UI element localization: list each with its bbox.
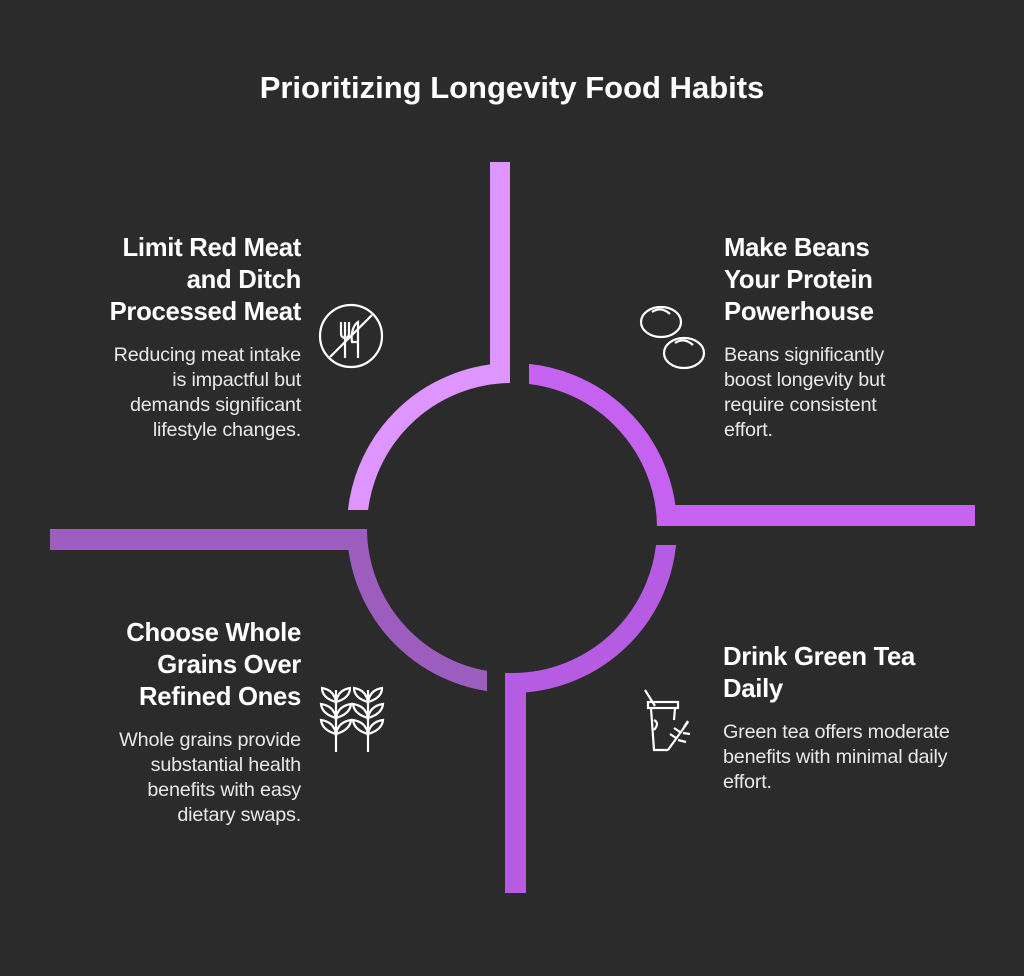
heading: red meat: and Ditch	[187, 266, 301, 294]
heading: whole grains	[126, 619, 301, 711]
heading: beans: Make Beans	[724, 234, 870, 262]
segment: bottom-left	[50, 373, 667, 683]
body: red meat: Reducing meat intake	[114, 344, 301, 366]
segment: bottom-right	[505, 545, 676, 893]
icon: wheat	[321, 688, 383, 752]
body: red meat: demands significant	[130, 394, 301, 416]
heading: green tea: Drink Green Tea	[723, 643, 915, 671]
body: red meat	[114, 344, 302, 441]
heading: green tea	[723, 643, 916, 703]
segment: top-right	[357, 373, 975, 683]
heading: beans: Your Protein	[724, 266, 873, 294]
title: Prioritizing Longevity Food Habits	[260, 70, 764, 105]
heading: green tea: Daily	[723, 675, 783, 703]
text block: whole grains	[119, 619, 302, 826]
heading: red meat: Processed Meat	[110, 298, 301, 326]
icon: tea cup	[645, 690, 690, 750]
heading: whole grains: Choose Whole	[126, 619, 301, 647]
body: beans	[724, 344, 886, 441]
icon: beans	[641, 307, 704, 368]
body: beans: boost longevity but	[724, 369, 885, 391]
body: beans: require consistent	[724, 394, 877, 416]
body: whole grains: substantial health	[151, 754, 301, 776]
body: whole grains	[119, 729, 302, 826]
heading: beans: Powerhouse	[724, 298, 874, 326]
body: green tea	[723, 721, 950, 793]
body: whole grains: dietary swaps.	[177, 804, 301, 826]
text block: red meat	[110, 234, 302, 441]
body: whole grains: Whole grains provide	[119, 729, 301, 751]
body: whole grains: benefits with easy	[147, 779, 301, 801]
heading: red meat	[110, 234, 301, 326]
heading: whole grains: Refined Ones	[139, 683, 301, 711]
body: beans: effort.	[724, 419, 773, 441]
body: green tea: Green tea offers moderate	[723, 721, 950, 743]
heading: whole grains: Grains Over	[157, 651, 301, 679]
diagram: ring with arms	[50, 162, 975, 893]
heading: beans	[724, 234, 874, 326]
text block: beans	[724, 234, 886, 441]
icon: no meat	[320, 305, 382, 367]
body: green tea: benefits with minimal daily	[723, 746, 947, 768]
body: green tea: effort.	[723, 771, 772, 793]
segment: top-left	[348, 162, 510, 510]
body: beans: Beans significantly	[724, 344, 884, 366]
text block: green tea	[723, 643, 950, 793]
body: red meat: is impactful but	[172, 369, 301, 391]
body: red meat: lifestyle changes.	[153, 419, 301, 441]
heading: red meat: Limit Red Meat	[122, 234, 301, 262]
